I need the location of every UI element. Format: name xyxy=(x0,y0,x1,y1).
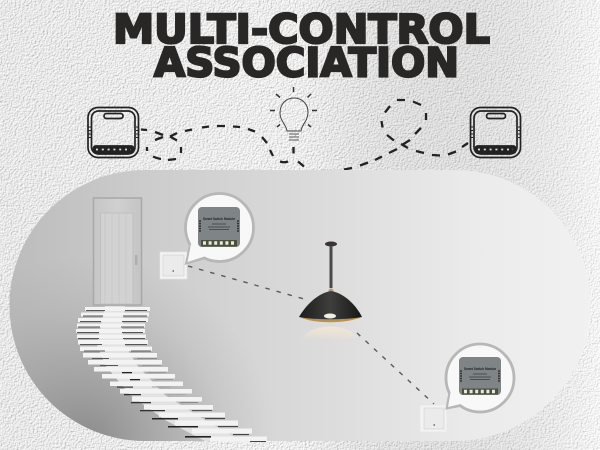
dashed connection right xyxy=(312,100,468,172)
icon: right switch module xyxy=(470,108,521,158)
lower wall switch xyxy=(420,405,447,432)
pendant lamp xyxy=(299,242,362,340)
upper callout with module xyxy=(186,194,254,263)
upper callout with module: Smart Switch Module xyxy=(203,217,235,221)
staircase xyxy=(76,306,267,442)
connection: lamp to lower switch xyxy=(357,333,434,404)
title: MULTI-CONTROL xyxy=(113,7,490,53)
title: ASSOCIATION xyxy=(154,40,459,86)
panel: room scene xyxy=(10,170,590,442)
lower callout with module xyxy=(446,344,514,412)
icon: left switch module xyxy=(88,108,139,158)
connection: upper switch to lamp xyxy=(188,266,304,299)
lower callout with module: Smart Switch Module xyxy=(464,367,496,371)
icon: light bulb xyxy=(270,87,317,140)
title xyxy=(113,7,490,86)
upper wall switch xyxy=(160,252,187,279)
dashed connection left xyxy=(141,126,304,166)
door xyxy=(94,198,142,305)
